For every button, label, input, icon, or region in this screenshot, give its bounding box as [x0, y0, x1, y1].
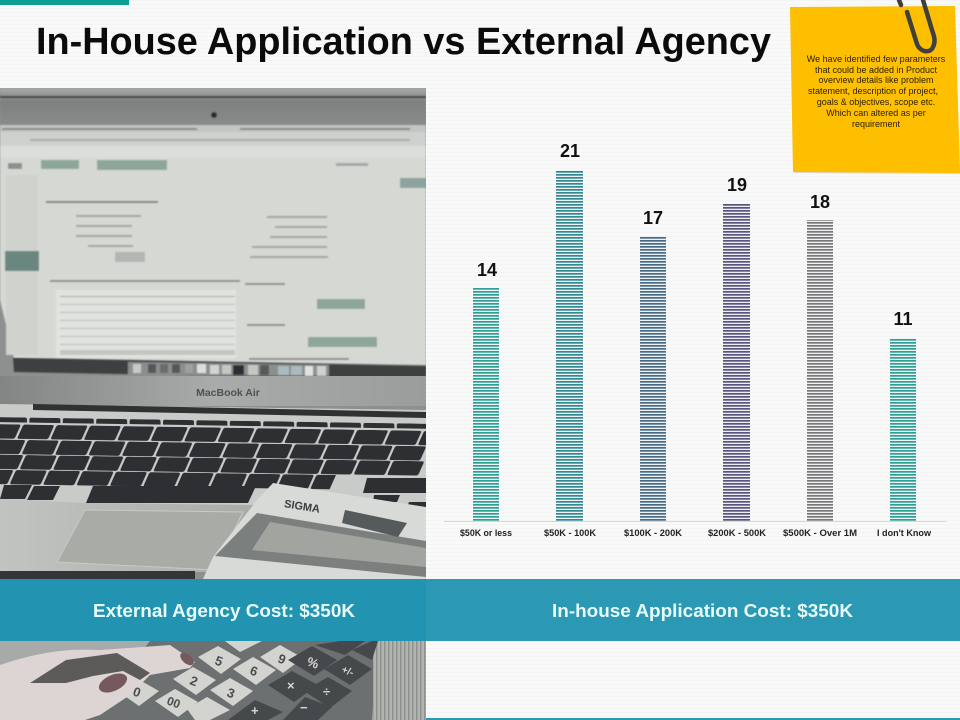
photo: laptop and calculator — [0, 88, 450, 720]
bottom right accent line — [426, 718, 960, 720]
bar: $100K - 200K: 17 — [643, 208, 663, 228]
bar: $500K - Over 1M: 18 — [810, 192, 830, 212]
note text — [807, 54, 946, 129]
hand and calculator keypad: × — [287, 678, 295, 693]
bar: $50K - 100K: 21 — [560, 141, 580, 161]
bar: I don't Know: 11 — [893, 309, 913, 329]
hand — [0, 645, 195, 720]
bar: $500K - Over 1M: $500K - Over 1M — [783, 528, 857, 538]
top accent bar — [0, 0, 129, 5]
bar: $100K - 200K — [624, 208, 683, 538]
bar: $50K - 100K: $50K - 100K — [544, 528, 597, 538]
bar: $200K - 500K: $200K - 500K — [708, 528, 767, 538]
note text: requirement — [852, 119, 901, 129]
bar: $50K - 100K — [544, 141, 597, 538]
hand and calculator keypad: % — [305, 654, 321, 672]
note text: overview details like problem — [818, 75, 934, 85]
icon: paperclip — [899, 0, 935, 51]
note text: statement, description of project, — [808, 86, 938, 96]
hand and calculator keypad: 3 — [225, 685, 237, 701]
hand and calculator keypad: 00 — [165, 694, 183, 711]
hand and calculator keypad: 6 — [248, 663, 260, 679]
band text: in-house application cost: In-house Application Cost: $350K — [552, 601, 853, 621]
note text: We have identified few parameters — [807, 54, 946, 64]
bar: I don't Know: I don't Know — [877, 528, 932, 538]
sticky note — [790, 0, 960, 174]
axis line — [444, 521, 946, 522]
bar: $50K or less — [460, 260, 512, 538]
note text: Which can altered as per — [826, 108, 926, 118]
hand and calculator keypad: 9 — [276, 651, 288, 667]
hand and calculator keypad: +/- — [340, 664, 355, 679]
note text: goals & objectives, scope etc. — [817, 97, 935, 107]
hand and calculator keypad — [0, 641, 426, 720]
laptop screen — [0, 125, 426, 365]
bar chart — [444, 141, 946, 538]
hand and calculator keypad: − — [300, 700, 308, 715]
hand and calculator keypad: 2 — [188, 673, 200, 689]
lower bezel with MacBook Air text — [0, 376, 426, 406]
title: In-House Application vs External Agency — [36, 21, 771, 63]
calculator: SIGMA — [283, 498, 321, 516]
hand and calculator keypad: ÷ — [323, 684, 330, 699]
hand and calculator keypad: 0 — [131, 684, 143, 700]
blue cost band — [0, 579, 960, 641]
calculator — [203, 483, 426, 579]
lower bezel with MacBook Air text: MacBook Air — [196, 387, 260, 399]
hand and calculator keypad: 5 — [213, 653, 225, 669]
bar: $200K - 500K: 19 — [727, 175, 747, 195]
band text: external agency cost: External Agency Cost: $350K — [93, 601, 355, 621]
bar: $500K - Over 1M — [783, 192, 857, 538]
bar: $50K or less: $50K or less — [460, 528, 512, 538]
note text: that could be added in Product — [815, 65, 938, 75]
trackpad area — [0, 499, 258, 579]
hand and calculator keypad: + — [251, 703, 259, 718]
bar: $200K - 500K — [708, 175, 767, 538]
dock bar — [12, 358, 426, 376]
bar: $100K - 200K: $100K - 200K — [624, 528, 683, 538]
bar: $50K or less: 14 — [477, 260, 497, 280]
keyboard — [0, 404, 450, 510]
laptop screen bezel — [0, 88, 426, 120]
bar: I don't Know — [877, 309, 932, 538]
